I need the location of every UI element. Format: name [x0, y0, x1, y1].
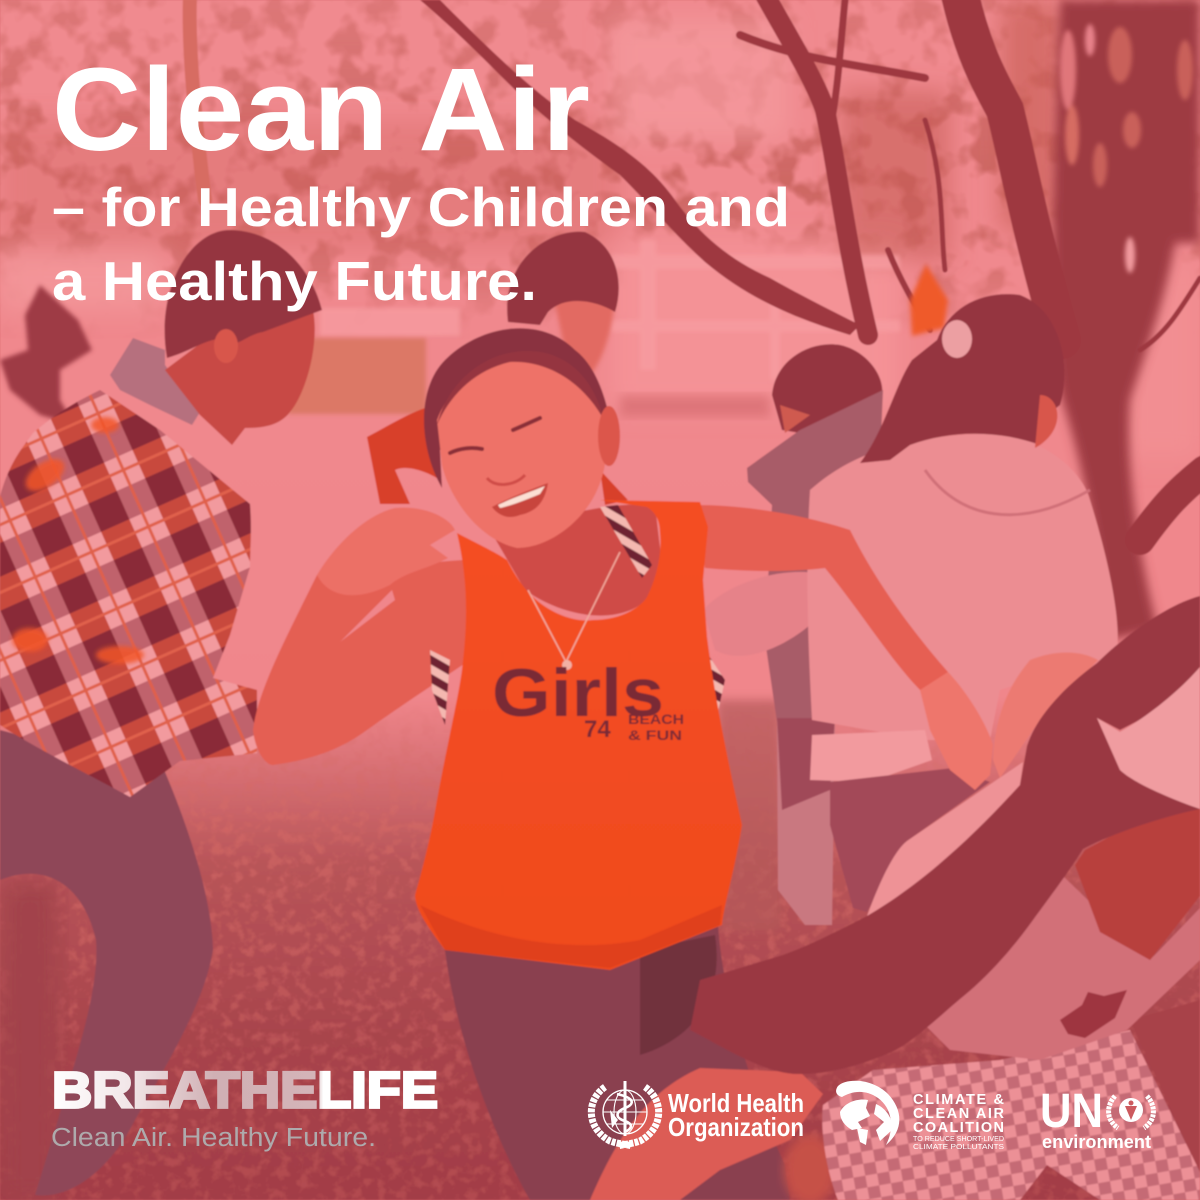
girl: nose shade: [487, 475, 525, 484]
girl: left arm raised: [253, 560, 470, 765]
running child: shirt shoulder: [867, 762, 1023, 916]
girl: back straps, striped: [430, 650, 725, 770]
dark hair and ponytail: [860, 294, 1064, 463]
girl: orange sleeveless top: [415, 500, 742, 970]
girl: hand at right: [920, 672, 993, 790]
girl: shirt print: Girls: [492, 655, 664, 731]
running child: long dark hair: [690, 596, 1200, 1074]
girl in orange top, main subject: [253, 328, 993, 1200]
logo wordmark: BREATHELIFE: [52, 1062, 438, 1118]
CCAC wordmark: TO REDUCE SHORT-LIVED: [913, 1134, 1005, 1143]
ear: [1035, 395, 1057, 448]
logo: UN Environment: [1040, 1085, 1153, 1152]
UN letters: UN: [1040, 1085, 1103, 1138]
girl: right arm extended: [695, 505, 948, 692]
boy in plaid shirt on the left: [0, 230, 322, 1196]
girl: raised hand: [317, 508, 455, 595]
children on the right: [703, 294, 1118, 925]
girl: face: [437, 357, 606, 548]
subtitle: – for Healthy Children and: [52, 176, 790, 238]
child in grey hoodie: hoodie: [747, 390, 883, 722]
running child at bottom right with long hair: [590, 596, 1200, 1200]
boy: hair: [165, 230, 322, 358]
jeans of child behind: [777, 718, 835, 925]
boy: plaid shirt: [0, 390, 257, 797]
boy: head and neck: [165, 310, 315, 445]
child in grey hoodie: head: [772, 344, 882, 433]
background: flecks in the canopy: [1060, 24, 1193, 273]
girl: hair front: [437, 351, 604, 425]
running child: shirt: [925, 876, 1200, 1060]
girl: swimsuit strap: [600, 505, 652, 578]
BreatheLife logo: [51, 1062, 438, 1152]
CCAC wordmark: [913, 1092, 1005, 1151]
girl: hair back: [424, 328, 610, 488]
title: Clean Air: Clean Air: [52, 44, 590, 176]
background: tree trunk and branches: [190, 0, 1200, 640]
running child: arm: [590, 1068, 823, 1200]
running child: flower print: [1060, 990, 1127, 1038]
girl: necklace: [528, 552, 620, 662]
orange flag in the tree: [910, 264, 948, 336]
girl: denim shorts: [445, 925, 790, 1200]
girl: ear: [598, 406, 620, 466]
CCAC wordmark: CLEAN AIR: [913, 1106, 1005, 1122]
background: plant leaves on the left: [0, 285, 92, 425]
boy: shirt highlights: [12, 417, 144, 664]
girl: shirt print: [492, 655, 684, 743]
logo: Climate and Clean Air Coalition: [836, 1081, 1005, 1151]
dark ground at right: [1130, 1000, 1200, 1172]
UN emblem: [1109, 1096, 1153, 1128]
orange blur at bottom: [784, 1135, 836, 1200]
boy: ear: [214, 329, 238, 363]
boy: jeans: [0, 730, 213, 1196]
logo: World Health Organization: [591, 1081, 804, 1146]
girl: shirt print: BEACH: [628, 712, 684, 727]
undershirt: [810, 730, 932, 782]
CCAC globe with swoosh: [836, 1081, 899, 1145]
girl: eyes: [450, 418, 540, 453]
background: white fence: [320, 240, 900, 380]
hand of child in white hoodie: [993, 652, 1098, 778]
subtitle: a Healthy Future.: [52, 250, 537, 312]
CCAC wordmark: CLIMATE POLLUTANTS: [913, 1142, 1004, 1151]
running child: neck and face: [1075, 805, 1200, 960]
running child: white cap: [1097, 667, 1200, 809]
girl: shirt print: & FUN: [628, 728, 682, 743]
hair band: [942, 320, 972, 358]
logo tagline: Clean Air. Healthy Future.: [51, 1124, 376, 1152]
CCAC wordmark: CLIMATE &: [913, 1092, 1005, 1108]
girl: smile: [492, 483, 548, 517]
bundle of white clothing: [703, 572, 825, 656]
girl: shirt print: 74: [584, 716, 611, 743]
WHO wordmark: World Health: [668, 1088, 804, 1118]
running child: checkered skirt: [822, 1030, 1200, 1200]
jeans of child in white hoodie: [830, 768, 990, 912]
background: olive wall patch: [288, 338, 426, 414]
CCAC wordmark: COALITION: [913, 1120, 1004, 1136]
WHO emblem: [591, 1081, 659, 1146]
environment word: environment: [1042, 1131, 1151, 1152]
boy: collar: [110, 338, 200, 425]
child in the background, head and red sleeve: [367, 232, 628, 505]
girl: chest and neck: [490, 504, 665, 616]
WHO wordmark: Organization: [668, 1112, 804, 1142]
WHO wordmark: [668, 1088, 804, 1142]
child in white hoodie: [807, 433, 1118, 740]
subtitle: [52, 176, 790, 312]
